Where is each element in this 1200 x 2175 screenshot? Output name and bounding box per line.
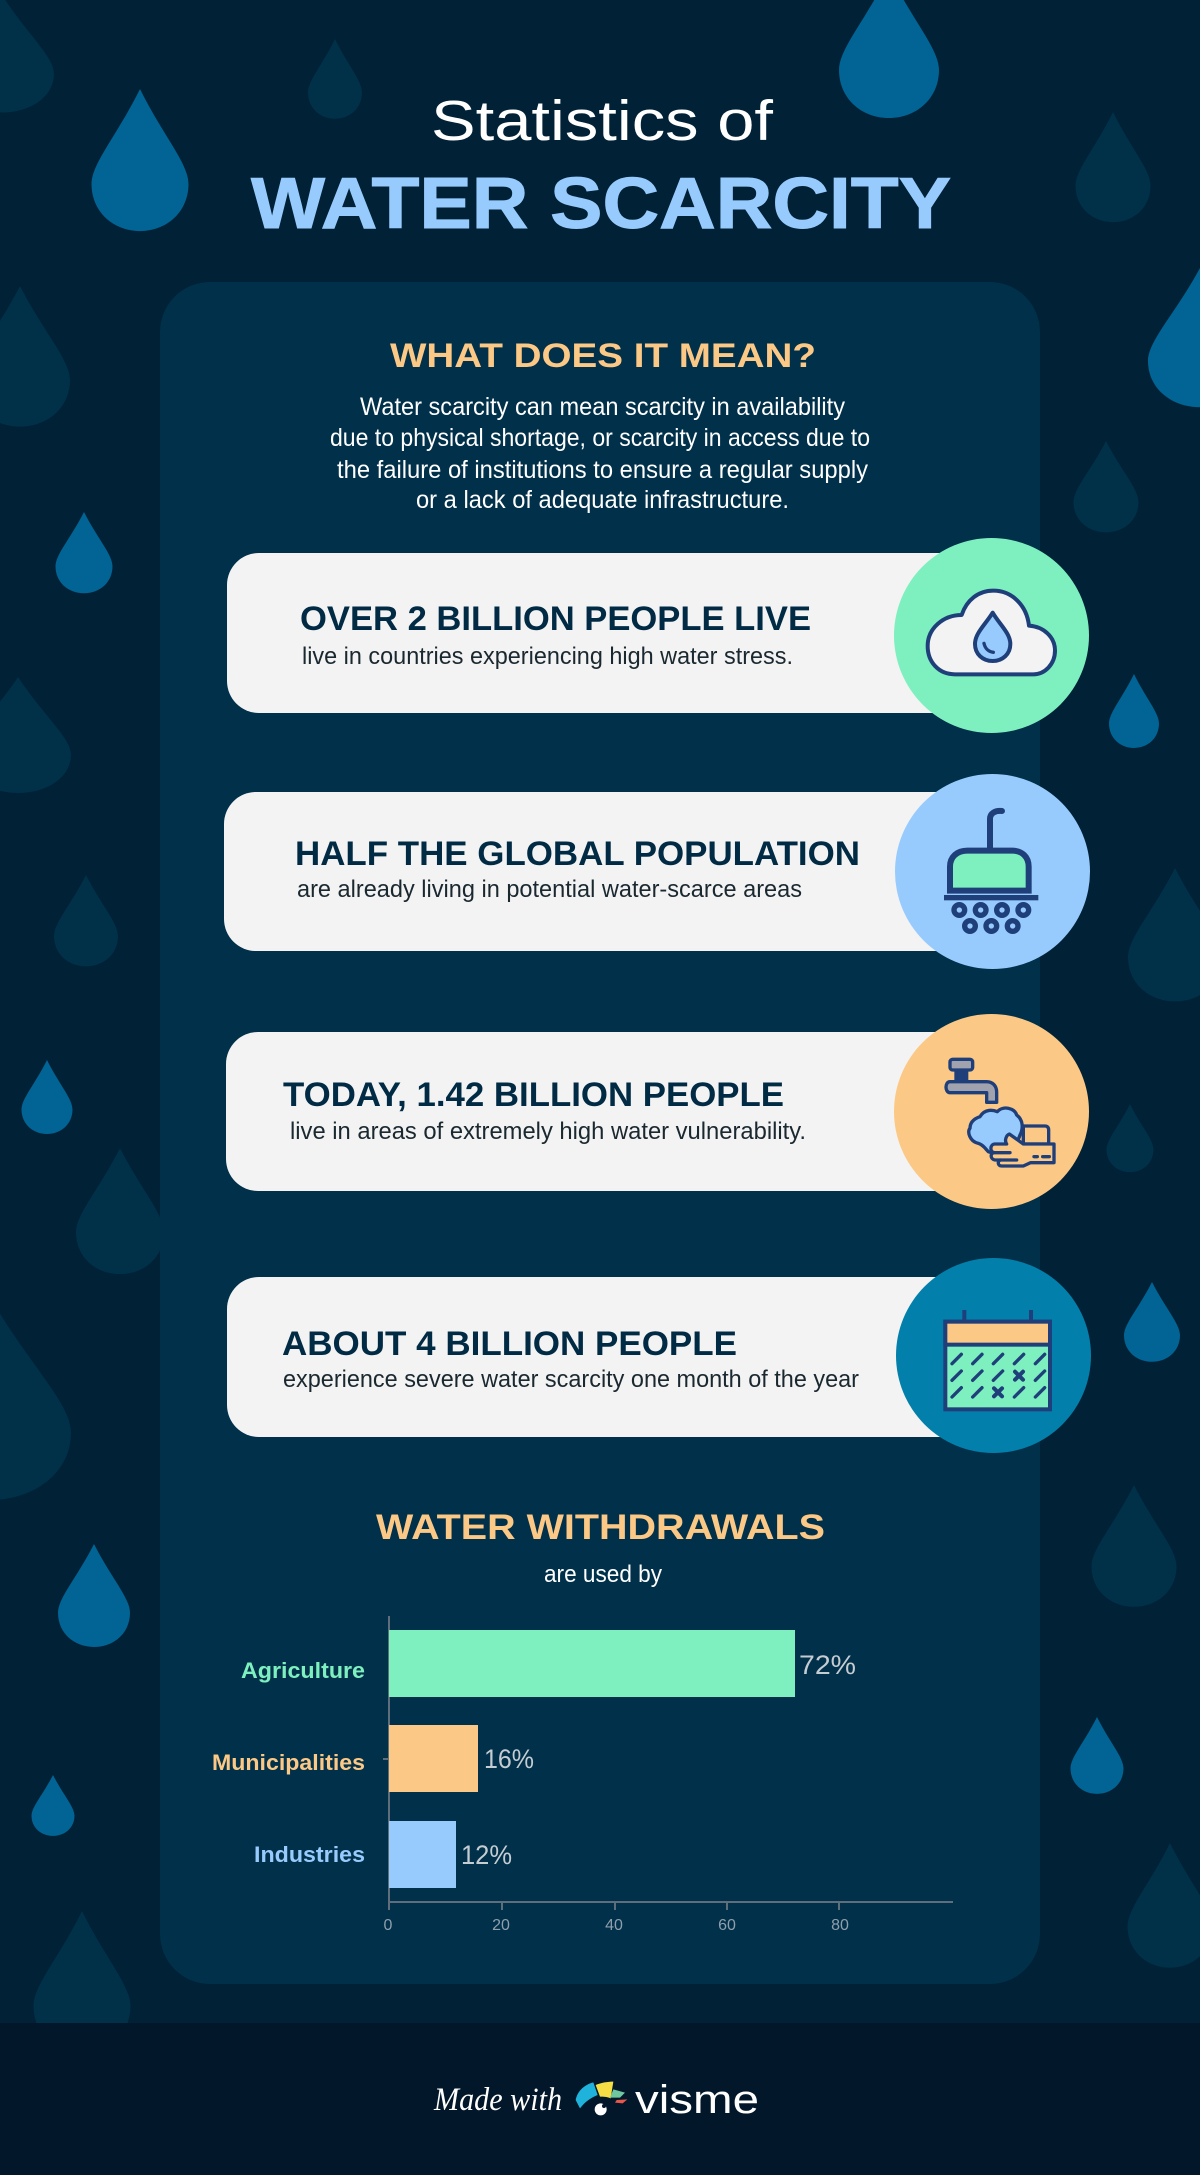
title: WATER SCARCITY [251,164,951,244]
bar: agriculture: Agriculture [241,1658,365,1683]
definition paragraph: due to physical shortage, or scarcity in access due to [330,424,870,452]
subheading: are used by: are used by [544,1561,662,1588]
card: today 1.42 billion people [226,1014,1089,1209]
x axis labels: 60 [718,1917,736,1934]
bar: agriculture [241,1630,856,1697]
card: half the global population [224,774,1090,969]
bar chart: water withdrawals [212,1616,953,1934]
main panel [160,282,1040,1984]
heading: what does it mean: WHAT DOES IT MEAN? [390,337,816,375]
icon circle: calendar [896,1258,1091,1453]
x axis labels: 40 [605,1917,623,1934]
definition paragraph: or a lack of adequate infrastructure. [416,486,789,514]
bar: agriculture: 72% [799,1650,856,1680]
card: about 4 billion people [227,1258,1091,1453]
x axis labels [384,1917,849,1934]
x axis labels: 20 [492,1917,510,1934]
title [251,89,951,244]
definition paragraph [330,393,870,514]
definition paragraph: Water scarcity can mean scarcity in availability [360,393,845,421]
icon circle: shower head [895,774,1090,969]
title: Statistics of [431,89,773,153]
card: about 4 billion people: experience severe water scarcity one month of the year [283,1366,859,1393]
card: over 2 billion people: OVER 2 BILLION PEOPLE LIVE [300,600,811,638]
footer: made with visme [433,2078,759,2122]
bar: industries: Industries [254,1842,365,1867]
card: half the global population: HALF THE GLOBAL POPULATION [295,835,860,873]
footer: made with visme: visme [635,2078,759,2122]
card: today 1.42 billion people: live in areas of extremely high water vulnerability. [290,1118,806,1145]
card: over 2 billion people [227,538,1089,733]
icon: visme logo [576,2082,627,2115]
bar: municipalities: Municipalities [212,1750,365,1775]
card: about 4 billion people: ABOUT 4 BILLION PEOPLE [282,1325,737,1363]
bar: municipalities [212,1725,534,1792]
card: over 2 billion people: live in countries experiencing high water stress. [302,643,793,670]
footer: made with visme: Made with [433,2082,562,2118]
bar: industries [254,1821,512,1888]
icon circle: faucet and washing hands [894,1014,1089,1209]
card: today 1.42 billion people: TODAY, 1.42 BILLION PEOPLE [283,1076,784,1114]
heading: water withdrawals: WATER WITHDRAWALS [376,1508,825,1547]
definition paragraph: the failure of institutions to ensure a regular supply [337,456,868,484]
icon circle: cloud with water drop [894,538,1089,733]
bar: industries: 12% [461,1840,512,1870]
x axis labels: 0 [384,1917,393,1934]
bar: municipalities: 16% [484,1744,534,1774]
footer band [0,2023,1200,2175]
card: half the global population: are already living in potential water-scarce areas [297,876,802,903]
x axis labels: 80 [831,1917,849,1934]
